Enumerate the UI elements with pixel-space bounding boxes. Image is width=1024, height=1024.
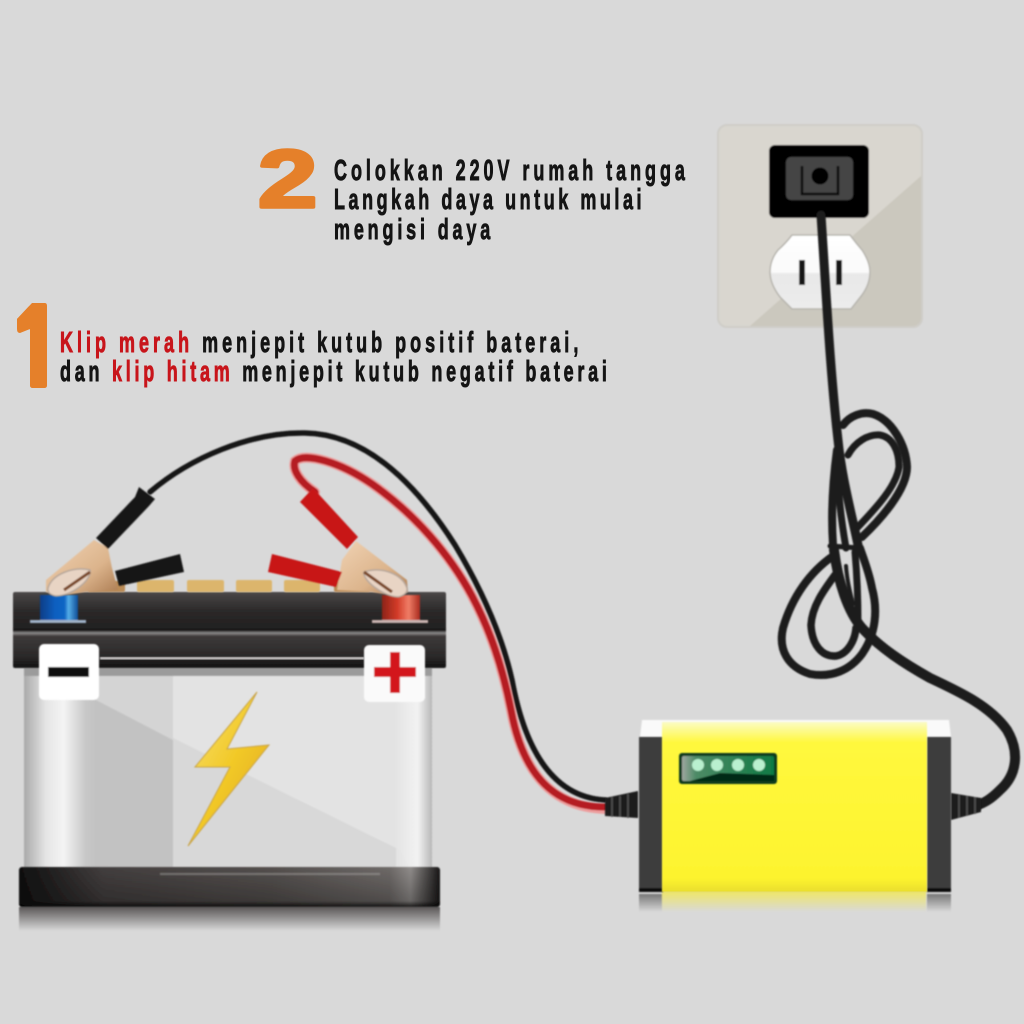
charger reflection	[639, 892, 951, 912]
clamp handles	[300, 488, 358, 549]
minus label	[39, 644, 99, 700]
outlet plate	[718, 125, 922, 327]
plus label	[364, 645, 425, 702]
negative terminal	[30, 595, 86, 623]
step 2 instruction text	[334, 155, 685, 246]
clamp handles	[96, 487, 155, 549]
clamp jaw	[337, 541, 408, 597]
step 1 instruction text	[60, 327, 607, 388]
socket slots	[799, 260, 842, 285]
black cable	[150, 433, 605, 800]
power cord	[782, 215, 1015, 806]
plug head	[769, 145, 869, 218]
charger top edge	[640, 720, 951, 737]
battery base	[19, 867, 440, 931]
battery casing	[24, 668, 432, 868]
positive terminal	[372, 595, 428, 623]
wall outlet	[718, 125, 922, 327]
step 2 number: 2	[258, 134, 317, 225]
step 1 instruction text: dan klip hitam menjepit kutub negatif baterai	[60, 356, 607, 388]
charger	[605, 720, 981, 912]
battery	[13, 580, 446, 931]
right strain relief	[951, 793, 981, 820]
charger yellow body	[662, 722, 927, 892]
step 2 instruction text: Colokkan 220V rumah tangga	[334, 155, 685, 187]
red cable	[294, 458, 605, 809]
charger side panels	[639, 737, 951, 892]
left strain relief	[605, 791, 638, 818]
lightning bolt	[188, 692, 269, 846]
clamp jaw	[46, 540, 118, 596]
black clamp	[46, 487, 184, 596]
step 2 instruction text: mengisi daya	[334, 214, 491, 246]
vent caps	[88, 580, 370, 592]
red clamp	[268, 488, 408, 597]
battery lid	[13, 592, 446, 668]
step 2 instruction text: Langkah daya untuk mulai	[334, 184, 642, 216]
LED display	[679, 753, 777, 784]
socket face	[770, 235, 870, 309]
step 1 instruction text: Klip merah menjepit kutub positif baterai,	[60, 327, 578, 359]
